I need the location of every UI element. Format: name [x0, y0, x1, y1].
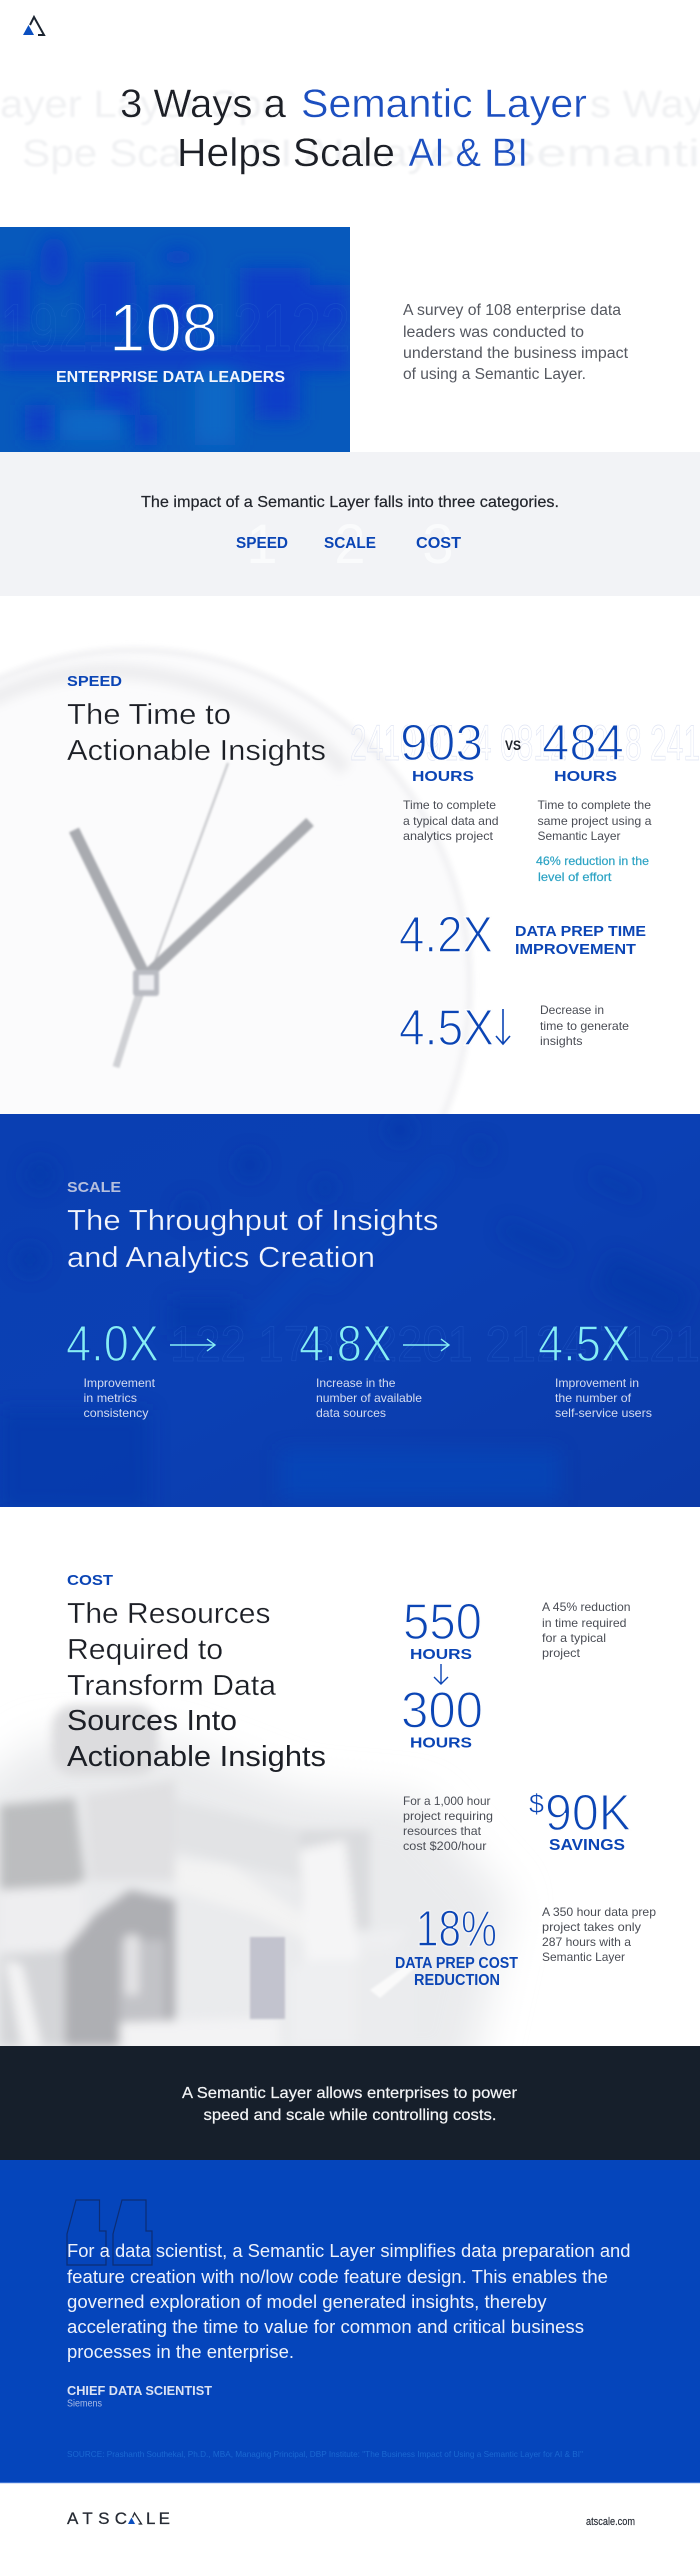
stat: 4.8X: number of available [316, 1391, 422, 1405]
ghost repeated title text: s Way [590, 84, 700, 126]
stat: 903 hours: Time to complete [403, 798, 496, 812]
stat: 90K savings: 90K [545, 1784, 631, 1841]
panel: conclusion banner: speed and scale while controlling costs. [204, 2107, 497, 2124]
category labels: SCALE [324, 535, 376, 552]
callout: reduction: 46% reduction in the [536, 854, 649, 868]
logo mark [23, 17, 44, 35]
stat: 4.0X: 4.0X [66, 1315, 159, 1372]
stat: 4.5X: self-service users [555, 1406, 652, 1420]
heading: Actionable Insights [67, 735, 326, 767]
ghost digits: 1 [246, 512, 278, 575]
stat: 90K savings: $ [529, 1789, 544, 1819]
stat: 4.5X down: Decrease in [540, 1003, 604, 1017]
attribution: CHIEF DATA SCIENTIST [67, 2383, 212, 2398]
ghost repeated title text: Semanti [500, 133, 700, 175]
ghost repeated title text [0, 84, 700, 175]
panel: quote [0, 2160, 700, 2483]
stat: 18%: DATA PREP COST [395, 1955, 518, 1972]
panel: survey count: 108 [109, 290, 218, 366]
title: AI & BI [408, 131, 528, 175]
panel: three categories: The impact of a Semantic Layer falls into three categories. [141, 494, 559, 511]
text block: survey description: understand the business impact [403, 345, 629, 362]
stat: 4.5X down [400, 1006, 628, 1048]
heading [67, 1572, 326, 1773]
stat: 903 hours [402, 724, 498, 842]
stat: 4.2X [400, 917, 646, 954]
circuit board background [336, 1462, 550, 1490]
quote text: For a data scientist, a Semantic Layer simplifies data preparation and [67, 2241, 630, 2261]
category labels: COST [416, 535, 461, 552]
icon: down arrow [434, 1664, 448, 1684]
stat: 484 hours: 484 [542, 714, 624, 771]
icon: down arrow [496, 1009, 510, 1044]
heading: and Analytics Creation [67, 1242, 375, 1274]
panel: conclusion banner: A Semantic Layer allows enterprises to power [182, 2085, 518, 2102]
ghost digits [246, 512, 454, 575]
heading: COST [67, 1572, 113, 1589]
text: project cost [403, 1794, 493, 1853]
heading [67, 1179, 438, 1274]
stat: 4.5X down: insights [540, 1034, 582, 1048]
text block: survey description [403, 302, 629, 383]
title: Helps Scale [177, 131, 395, 175]
panel: cost [0, 1572, 656, 2080]
heading: Transform Data [67, 1670, 277, 1702]
stat: 4.0X: in metrics [84, 1391, 137, 1405]
arrow [170, 1339, 215, 1351]
stat: 4.5X: the number of [555, 1391, 632, 1405]
text block: survey description: of using a Semantic Layer. [403, 366, 586, 383]
callout: reduction: level of effort [538, 870, 612, 884]
stat: 4.0X [66, 1315, 159, 1420]
stat: 90K savings: SAVINGS [549, 1837, 625, 1854]
clock hands [74, 763, 310, 1067]
stat: 18% [396, 1910, 518, 1985]
stat: 4.5X: Improvement in [555, 1376, 639, 1390]
text: project cost: cost $200/hour [403, 1839, 487, 1853]
panel: conclusion banner [0, 2046, 700, 2160]
blurred photo of people [0, 236, 350, 445]
stat: 550 hours: HOURS [410, 1646, 472, 1663]
stat: 484 hours: Time to complete the [538, 798, 651, 812]
footer logo: ATSC [67, 2509, 127, 2528]
text: project cost: For a 1,000 hour [403, 1794, 490, 1808]
stat: 18%: REDUCTION [414, 1972, 500, 1989]
website: atscale.com [586, 2516, 635, 2528]
text: 350 hour project: Semantic Layer [542, 1950, 625, 1964]
panel: survey count: ENTERPRISE DATA LEADERS [56, 369, 285, 386]
stat: 903 hours: HOURS [412, 768, 474, 785]
text: project cost: resources that [403, 1824, 482, 1838]
stat: 90K savings [529, 1793, 629, 1850]
text block: survey description: leaders was conducted to [403, 324, 584, 341]
quote text: processes in the enterprise. [67, 2342, 294, 2362]
stat: 903 hours: analytics project [403, 829, 494, 843]
stat: 484 hours: same project using a [538, 814, 652, 828]
panel: three categories [0, 452, 700, 596]
ghost digits: 3 [422, 512, 454, 575]
stat: 903 hours: a typical data and [403, 814, 498, 828]
stat: 4.0X: consistency [84, 1406, 148, 1420]
text: 45% reduction: for a typical [542, 1631, 606, 1645]
stat: 484 hours: Semantic Layer [538, 829, 621, 843]
heading [67, 673, 326, 767]
heading: SPEED [67, 673, 122, 690]
title: Semantic Layer [301, 82, 587, 126]
stat: 300 hours [403, 1692, 480, 1748]
heading: SCALE [67, 1179, 121, 1196]
footer [67, 2509, 635, 2528]
stat: 4.8X: 4.8X [299, 1315, 392, 1372]
text: project cost: project requiring [403, 1809, 493, 1823]
stat: 4.8X: data sources [316, 1406, 386, 1420]
heading: The Throughput of Insights [67, 1205, 438, 1237]
panel: survey count [0, 227, 350, 452]
stat: 484 hours [538, 714, 652, 843]
stat: 4.5X down: 4.5X [399, 999, 494, 1056]
heading: Required to [67, 1634, 223, 1666]
stat: 18%: 18% [416, 1900, 497, 1957]
text block: survey description: A survey of 108 enterprise data [403, 302, 621, 319]
footer logo [67, 2509, 170, 2528]
grayscale photo background [0, 1705, 510, 2080]
ghost repeated title text: BI AI Layer [250, 133, 470, 175]
stat: 550 hours: 550 [403, 1593, 482, 1650]
heading: Actionable Insights [67, 1741, 326, 1773]
arrow [403, 1339, 449, 1351]
ghost repeated title text: Spe Sca [22, 133, 183, 175]
stat: 300 hours: 300 [401, 1682, 483, 1738]
quote text: accelerating the time to value for common and critical business [67, 2317, 584, 2337]
text: 350 hour project: 287 hours with a [542, 1935, 631, 1949]
quote text: governed exploration of model generated insights, thereby [67, 2292, 546, 2312]
attribution [67, 2383, 212, 2410]
title: 3 Ways a [120, 82, 287, 126]
category labels [236, 535, 461, 552]
stat: 4.5X [540, 1326, 652, 1417]
category labels: SPEED [236, 535, 288, 552]
ghost repeated title text: ayer Layer Spe [0, 84, 285, 126]
stat: 550 hours [405, 1604, 480, 1659]
text: 45% reduction: project [542, 1646, 581, 1660]
source note: SOURCE: Prashanth Southekal, Ph.D., MBA, Managing Principal, DBP Institute: "The Business Impact of Using a Semantic Layer for AI & BI" [67, 2449, 583, 2459]
stat: 300 hours: HOURS [410, 1734, 472, 1752]
title [0, 82, 700, 175]
panel: scale [0, 1114, 700, 1510]
text: 350 hour project: A 350 hour data prep [542, 1905, 656, 1919]
callout: reduction [536, 856, 649, 882]
stat: 4.5X: 4.5X [538, 1315, 631, 1372]
stat: 4.0X: Improvement [84, 1376, 156, 1390]
text: 350 hour project [542, 1905, 656, 1964]
panel: speed [0, 648, 699, 1114]
ghost numbers: 192120812122 [0, 290, 350, 366]
heading: The Resources [67, 1598, 270, 1630]
clock image [0, 648, 472, 1114]
stat: 4.8X [300, 1326, 422, 1417]
heading: The Time to [67, 699, 231, 731]
text: 45% reduction: in time required [542, 1616, 626, 1630]
stat: 4.2X: 4.2X [399, 906, 493, 963]
stat: 4.2X: IMPROVEMENT [515, 941, 636, 958]
text: 45% reduction: A 45% reduction [542, 1600, 630, 1614]
heading: Sources Into [67, 1705, 237, 1737]
text: 45% reduction [542, 1600, 630, 1660]
attribution: Siemens [67, 2398, 102, 2410]
ghost digits: 2 [334, 512, 366, 575]
quote text: feature creation with no/low code feature design. This enables the [67, 2267, 608, 2287]
footer logo: LE [146, 2509, 170, 2528]
text: 350 hour project: project takes only [542, 1920, 641, 1934]
stat: 4.2X: DATA PREP TIME [515, 923, 646, 940]
stat: 4.5X down: time to generate [540, 1019, 629, 1033]
stat: 903 hours: 903 [400, 714, 483, 771]
quote text [67, 2241, 630, 2362]
stat: 484 hours: HOURS [554, 768, 617, 785]
stat: 4.8X: Increase in the [316, 1376, 396, 1390]
icon: quote mark [67, 2200, 152, 2265]
versus: VS [505, 737, 521, 753]
